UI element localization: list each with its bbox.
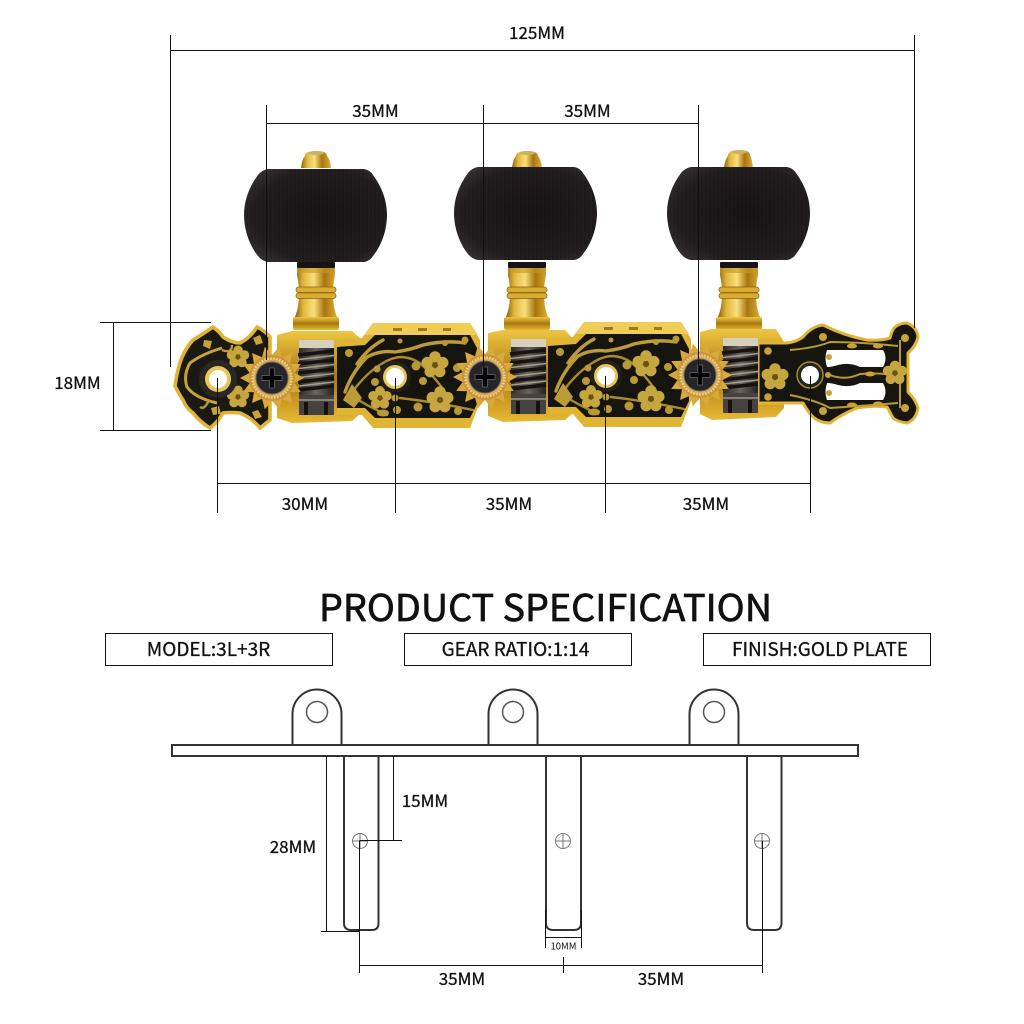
spec box: gear ratio [404, 634, 632, 666]
photo: tuner assembly [175, 150, 918, 428]
top pin 3 [724, 150, 753, 168]
plate finger 1 [344, 756, 378, 930]
decorated plate centre [337, 323, 480, 428]
gear 2 [453, 346, 517, 408]
plate finger 3 [747, 756, 782, 930]
knob 1 [244, 169, 387, 262]
gearbox base plates [277, 329, 784, 423]
tuning post 2 [504, 262, 550, 330]
top pin 2 [512, 151, 542, 168]
knob 3 [667, 167, 810, 260]
label: second hole spacing: 35MM [486, 490, 532, 515]
label: plate length: 28MM [270, 833, 316, 858]
tuning post 3 [716, 262, 762, 330]
label: first hole spacing: 30MM [282, 490, 328, 515]
top pin 1 [301, 151, 331, 168]
right end plate [758, 323, 918, 423]
label: third hole spacing: 35MM [683, 490, 729, 515]
dimension lines: technical drawing [321, 756, 762, 973]
left end plate [175, 327, 270, 428]
label: bottom spacing left: 35MM [439, 965, 485, 990]
spec box: finish: FINISH:GOLD PLATE [732, 635, 908, 662]
label: overall length: 125MM [509, 19, 565, 44]
spec box: gear ratio: GEAR RATIO:1:14 [442, 635, 589, 662]
plate finger 2 [546, 756, 581, 930]
spec box: finish [704, 634, 930, 666]
mounting bar [172, 745, 858, 756]
label: plate height: 18MM [54, 369, 101, 394]
gear 3 [668, 344, 732, 406]
knob 2 [454, 167, 597, 260]
dimension lines: top photo [100, 35, 914, 513]
label: post spacing left: 35MM [352, 97, 399, 122]
mounting tab 1 [292, 690, 342, 745]
spec box: model [106, 634, 332, 666]
gear 1 [240, 347, 304, 409]
label: post spacing right: 35MM [564, 97, 611, 122]
mounting tab 2 [488, 690, 538, 745]
mounting tab 3 [690, 690, 738, 745]
worm gear 1 [298, 340, 334, 415]
worm gear 3 [722, 338, 758, 413]
title: PRODUCT SPECIFICATION [319, 578, 772, 632]
label: bottom spacing right: 35MM [638, 965, 684, 990]
technical drawing: mounting plate [172, 690, 858, 930]
tuning post 1 [293, 262, 339, 330]
worm gear 2 [510, 339, 546, 414]
decorated plate centre right [548, 322, 691, 427]
spec box: model: MODEL:3L+3R [147, 635, 270, 662]
label: finger width: 10MM [551, 938, 576, 952]
label: hole depth: 15MM [402, 787, 448, 812]
